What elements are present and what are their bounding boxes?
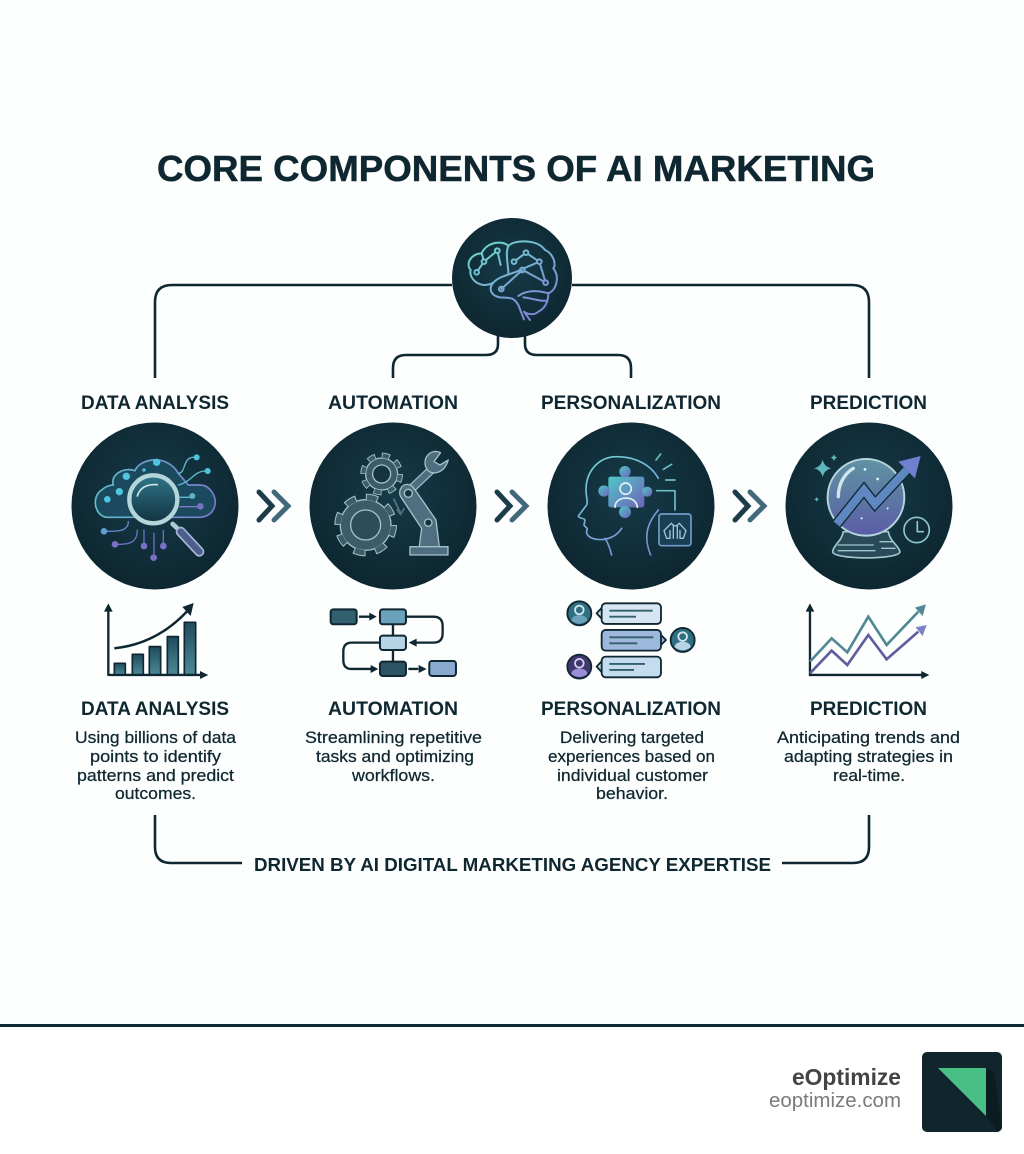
arrow: personalization to prediction xyxy=(735,492,764,520)
connector lines from central brain xyxy=(155,285,869,378)
text block: Personalization xyxy=(541,699,721,803)
text block: Personalization: individual customer xyxy=(557,767,709,785)
text block: Prediction xyxy=(777,699,960,785)
text block: Prediction: real-time. xyxy=(833,767,905,785)
text block: Personalization: behavior. xyxy=(596,785,668,803)
label: Prediction top heading: PREDICTION xyxy=(810,393,927,414)
label: Automation top heading: AUTOMATION xyxy=(328,393,458,414)
text block: Automation: AUTOMATION xyxy=(328,699,458,720)
text block: Automation: workflows. xyxy=(351,767,435,785)
chart: personalized chat bubbles xyxy=(567,601,695,679)
label: Data Analysis top heading: DATA ANALYSIS xyxy=(81,393,229,414)
icon: personalization head and puzzle xyxy=(548,422,714,590)
label: Personalization top heading: PERSONALIZATION xyxy=(541,393,721,414)
text block: Data Analysis: points to identify xyxy=(90,748,222,766)
arrow: automation to personalization xyxy=(497,492,526,520)
text block: Personalization: Delivering targeted xyxy=(560,729,704,747)
bottom bracket xyxy=(155,815,869,863)
text block: Personalization: PERSONALIZATION xyxy=(541,699,721,720)
chart: prediction trend lines xyxy=(806,603,929,679)
text block: Personalization: experiences based on xyxy=(548,748,715,766)
brand url: eoptimize.com xyxy=(769,1090,901,1112)
text block: Prediction: adapting strategies in xyxy=(784,748,953,766)
text block: Prediction: PREDICTION xyxy=(810,699,927,720)
tagline: DRIVEN BY AI DIGITAL MARKETING AGENCY EXPERTISE xyxy=(254,854,771,875)
arrow: data analysis to automation xyxy=(259,492,288,520)
brand name: eOptimize xyxy=(792,1064,901,1090)
icon: prediction crystal ball xyxy=(786,422,952,590)
icon: automation gears and robot arm xyxy=(310,422,476,590)
text block: Data Analysis xyxy=(75,699,237,803)
icon: central AI brain xyxy=(452,218,572,338)
text block: Prediction: Anticipating trends and xyxy=(777,729,960,747)
footer bar xyxy=(0,1024,1024,1154)
icon: eOptimize logo xyxy=(922,1052,1002,1132)
icon: data analysis cloud and magnifier xyxy=(72,422,238,590)
title: CORE COMPONENTS OF AI MARKETING xyxy=(157,148,875,189)
text block: Data Analysis: outcomes. xyxy=(115,785,196,803)
text block: Automation: tasks and optimizing xyxy=(316,748,474,766)
text block: Data Analysis: DATA ANALYSIS xyxy=(81,699,229,720)
chart: rising bars xyxy=(104,603,208,679)
text block: Automation xyxy=(305,699,482,785)
chart: workflow diagram xyxy=(331,609,456,676)
text block: Data Analysis: Using billions of data xyxy=(75,729,237,747)
text block: Automation: Streamlining repetitive xyxy=(305,729,482,747)
text block: Data Analysis: patterns and predict xyxy=(77,767,234,785)
